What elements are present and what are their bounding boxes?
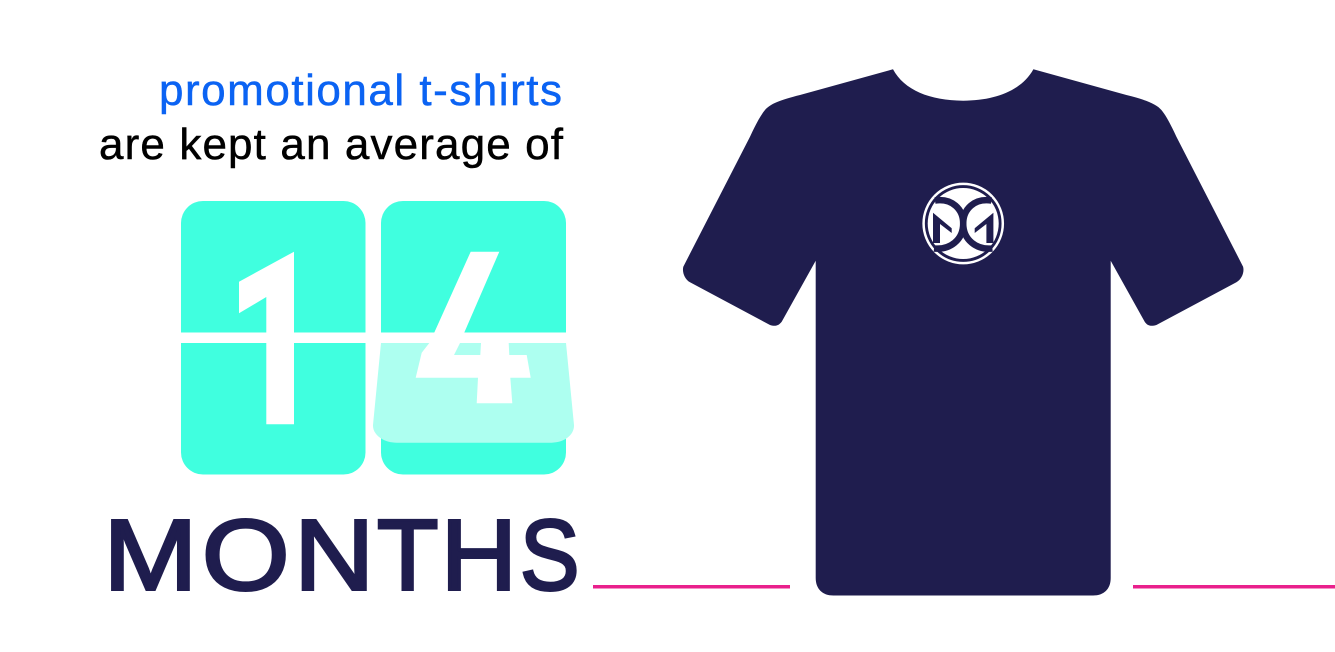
t-shirt — [683, 69, 1243, 596]
label: MONTHS: H — [441, 500, 517, 612]
heading: are kept an average of: are kept an average of — [99, 120, 564, 169]
pink line right — [1133, 585, 1335, 588]
flip card: digit 1 — [175, 201, 371, 474]
logo: DG roundel — [924, 184, 1003, 263]
heading: promotional t-shirts: promotional t-shirts — [159, 66, 562, 115]
label: MONTHS: N — [294, 500, 374, 612]
flip counter: 14 — [175, 201, 574, 474]
pink line left — [593, 585, 790, 588]
label: MONTHS: O — [202, 500, 290, 612]
label: MONTHS: M — [103, 500, 197, 612]
label: MONTHS: S — [520, 500, 579, 612]
flip card: digit 4 — [373, 201, 574, 474]
label: MONTHS: T — [377, 500, 438, 612]
